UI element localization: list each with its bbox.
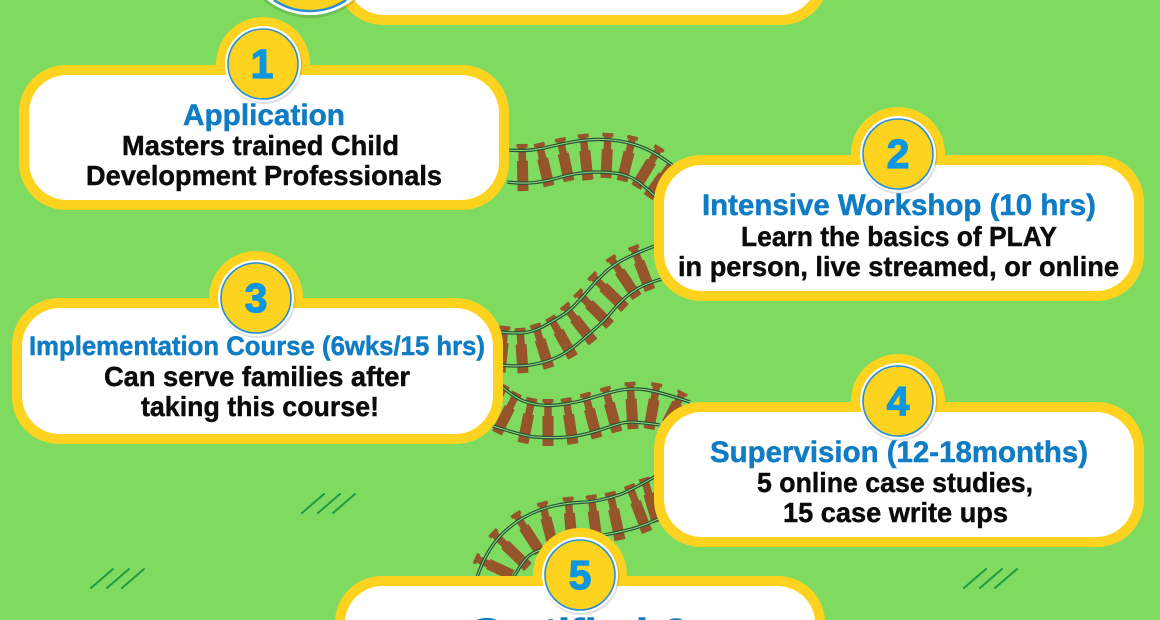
step 1 badge (225, 26, 302, 104)
step 4 description: 5 online case studies, (757, 467, 1033, 498)
step 4 badge (860, 363, 938, 441)
panel: step 3 implementation course (12, 251, 503, 444)
step 1 description: Masters trained Child (122, 130, 399, 161)
step 3 badge (218, 260, 296, 338)
step 3 description: Can serve families after (104, 361, 410, 392)
grass tuft: left (91, 569, 144, 588)
railway track: step 2 to step 3 (500, 244, 668, 373)
panel: step 2 intensive workshop (654, 107, 1144, 301)
step 2 heading: Intensive Workshop (10 hrs) (702, 189, 1096, 222)
step 1 badge: 1 (251, 41, 273, 87)
panel: step 1 application (19, 17, 509, 210)
step 2 badge (860, 116, 938, 194)
step 2 description: Learn the basics of PLAY (741, 221, 1057, 252)
step 2 badge: 2 (887, 131, 909, 177)
step 4 description: 15 case write ups (783, 497, 1008, 528)
step 4 badge: 4 (887, 378, 910, 424)
step 2 description (678, 221, 1119, 282)
step 3 description (104, 361, 410, 422)
step 1 heading: Application (183, 99, 345, 132)
step 3 heading: Implementation Course (6wks/15 hrs) (29, 331, 485, 361)
grass tuft: centre (302, 494, 355, 513)
railway track: step 1 to step 2 (507, 133, 672, 197)
step 1 description: Development Professionals (86, 160, 442, 191)
panel: step 4 supervision (654, 354, 1144, 547)
step 2 description: in person, live streamed, or online (678, 251, 1119, 282)
step 5 badge (542, 537, 620, 615)
railway track: step 4 to step 5 (475, 476, 658, 580)
railway track: step 3 to step 4 (485, 382, 690, 446)
grass tuft: right (964, 569, 1017, 588)
panel: step 5 certified (335, 528, 825, 620)
step 3 description: taking this course! (141, 391, 379, 422)
step 1 description (86, 130, 442, 191)
panel: top step (cropped) (263, 0, 823, 25)
step 4 heading: Supervision (12-18months) (710, 436, 1088, 469)
step 5 badge: 5 (569, 552, 591, 598)
step 3 badge: 3 (245, 275, 267, 321)
step 4 description (757, 467, 1033, 528)
